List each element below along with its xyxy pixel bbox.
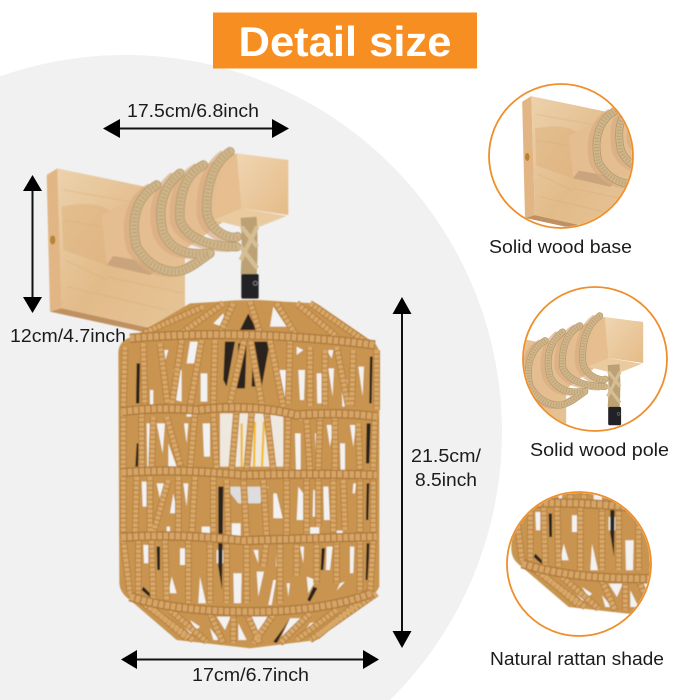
dimension: bracket height: [10, 175, 126, 346]
dimension: shade height: 8.5inch: [415, 470, 477, 490]
rattan lampshade: [118, 300, 379, 648]
detail circle: natural rattan shade: [506, 491, 652, 637]
label: solid wood base: Solid wood base: [489, 237, 632, 257]
detail circle: solid wood pole: [522, 286, 668, 432]
dimension: bracket height: 12cm/4.7inch: [10, 326, 126, 346]
dimension: shade width: 17cm/6.7inch: [192, 665, 309, 685]
wood bracket: [47, 152, 288, 340]
dimension: shade height: 21.5cm/: [411, 446, 481, 466]
label: natural rattan shade: Natural rattan shade: [490, 649, 664, 669]
panel: grey background circle: [0, 55, 502, 700]
detail circle: solid wood base: [488, 83, 634, 229]
dimension: shade height: [392, 297, 481, 648]
title banner: Detail size: [238, 18, 452, 65]
dimension: bracket width: 17.5cm/6.8inch: [127, 101, 259, 121]
dimension: shade width: [121, 650, 379, 685]
title banner: [213, 12, 477, 68]
dimension: bracket width: [103, 101, 289, 138]
label: solid wood pole: Solid wood pole: [530, 440, 669, 460]
